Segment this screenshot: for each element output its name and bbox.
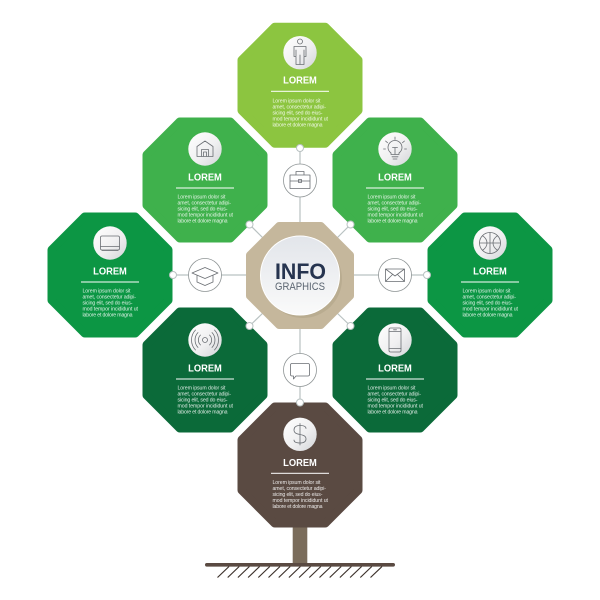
text block: Lorem ipsum dolor sit xyxy=(178,386,226,392)
ground line xyxy=(205,563,395,567)
text block: amet, consectetur adipi- xyxy=(82,295,136,301)
icon: wireless signal xyxy=(188,323,222,357)
text block xyxy=(368,386,424,416)
text block: mod tempor incididunt ut xyxy=(82,307,139,313)
ground hatching xyxy=(218,566,382,578)
connector nodes xyxy=(170,144,430,406)
text block: sicing elit, sed do eius- xyxy=(82,301,133,307)
panel: upper right lorem xyxy=(336,122,454,238)
text block: sicing elit, sed do eius- xyxy=(368,207,418,213)
icon: light bulb xyxy=(378,132,412,166)
text block xyxy=(178,386,234,416)
connectors between panels and hub xyxy=(173,148,427,403)
icon: smartphone xyxy=(378,323,412,357)
text block: labore et dolore magna xyxy=(272,504,323,510)
icon: basketball xyxy=(473,226,507,260)
text block: mod tempor incididunt ut xyxy=(368,213,424,219)
heading: LOREM xyxy=(93,267,127,278)
text block: Lorem ipsum dolor sit xyxy=(272,98,321,104)
text block: amet, consectetur adipi- xyxy=(368,201,421,207)
panel: left lorem xyxy=(52,216,168,334)
central hub xyxy=(250,226,350,326)
text block: mod tempor incididunt ut xyxy=(272,116,329,122)
text block: sicing elit, sed do eius- xyxy=(272,492,323,498)
icon: speech bubble connector xyxy=(284,354,316,386)
panel: right lorem xyxy=(432,216,548,334)
text block: amet, consectetur adipi- xyxy=(272,104,326,110)
panel: top lorem xyxy=(242,27,358,144)
text block: labore et dolore magna xyxy=(462,313,513,319)
text block: labore et dolore magna xyxy=(178,219,228,225)
text block: sicing elit, sed do eius- xyxy=(178,398,228,404)
heading: LOREM xyxy=(283,76,317,87)
text block: sicing elit, sed do eius- xyxy=(178,207,228,213)
panel: bottom lorem xyxy=(242,406,358,524)
text block: sicing elit, sed do eius- xyxy=(272,110,323,116)
text block: amet, consectetur adipi- xyxy=(462,295,516,301)
heading: LOREM xyxy=(283,458,317,469)
text block xyxy=(178,195,234,225)
text block: Lorem ipsum dolor sit xyxy=(272,480,321,486)
icon: graduation cap connector xyxy=(188,258,222,292)
text block: Lorem ipsum dolor sit xyxy=(368,386,416,392)
panel: lower right lorem xyxy=(336,312,454,428)
heading: LOREM xyxy=(473,267,507,278)
text block: Lorem ipsum dolor sit xyxy=(368,195,416,201)
text block xyxy=(272,480,329,510)
text block: mod tempor incididunt ut xyxy=(368,404,424,410)
text block: amet, consectetur adipi- xyxy=(272,486,326,492)
text block: amet, consectetur adipi- xyxy=(178,201,231,207)
text block: mod tempor incididunt ut xyxy=(272,498,329,504)
text block: labore et dolore magna xyxy=(178,410,228,416)
text block: Lorem ipsum dolor sit xyxy=(462,289,511,295)
hub title: INFO xyxy=(275,259,326,284)
icon: laptop xyxy=(93,226,127,260)
text block: labore et dolore magna xyxy=(368,410,418,416)
panel: upper left lorem xyxy=(146,122,264,238)
icon: person xyxy=(283,36,317,69)
text block xyxy=(462,289,519,319)
hub subtitle: GRAPHICS xyxy=(275,281,325,293)
text block: Lorem ipsum dolor sit xyxy=(82,289,131,295)
text block: sicing elit, sed do eius- xyxy=(368,398,418,404)
text block: amet, consectetur adipi- xyxy=(368,392,421,398)
text block: labore et dolore magna xyxy=(272,122,323,128)
text block: Lorem ipsum dolor sit xyxy=(178,195,226,201)
icon: briefcase connector xyxy=(284,164,316,197)
text block xyxy=(368,195,424,225)
icon: dollar sign xyxy=(283,418,317,451)
text block: mod tempor incididunt ut xyxy=(178,213,234,219)
trunk xyxy=(293,525,307,564)
text block: labore et dolore magna xyxy=(368,219,418,225)
heading: LOREM xyxy=(188,363,222,374)
panel: lower left lorem xyxy=(146,312,264,428)
text block: labore et dolore magna xyxy=(82,313,133,319)
heading: LOREM xyxy=(188,173,222,184)
text block xyxy=(272,98,329,128)
text block: mod tempor incididunt ut xyxy=(178,404,234,410)
icon: house xyxy=(188,132,222,166)
icon: envelope connector xyxy=(378,258,412,292)
heading: LOREM xyxy=(378,173,412,184)
text block: mod tempor incididunt ut xyxy=(462,307,519,313)
text block: sicing elit, sed do eius- xyxy=(462,301,513,307)
text block xyxy=(82,289,139,319)
heading: LOREM xyxy=(378,363,412,374)
text block: amet, consectetur adipi- xyxy=(178,392,231,398)
